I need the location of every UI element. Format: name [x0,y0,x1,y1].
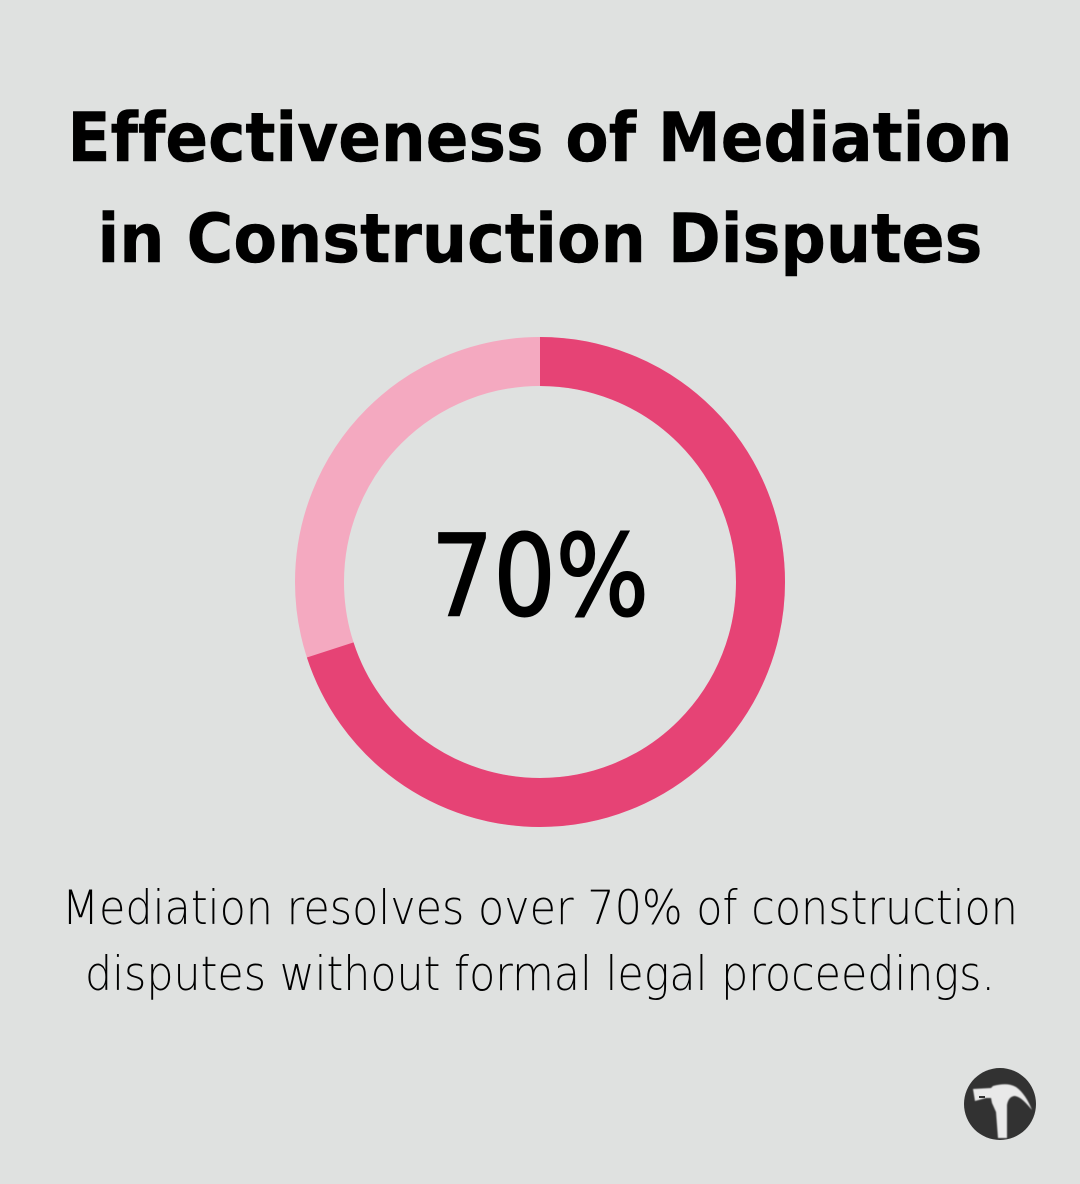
title [68,99,1012,279]
highlighted 70% arc [320,362,760,802]
description text: disputes without formal legal proceedings. [85,947,995,1002]
remaining 30% track [320,362,760,802]
donut chart: 70% [320,362,760,802]
title: Effectiveness of Mediation [68,99,1012,178]
description text [62,881,1018,1002]
title: in Construction Disputes [98,200,982,279]
icon: hammer logo [964,1068,1036,1140]
center value: 70% [431,512,649,642]
description text: Mediation resolves over 70% of construction [62,881,1018,936]
